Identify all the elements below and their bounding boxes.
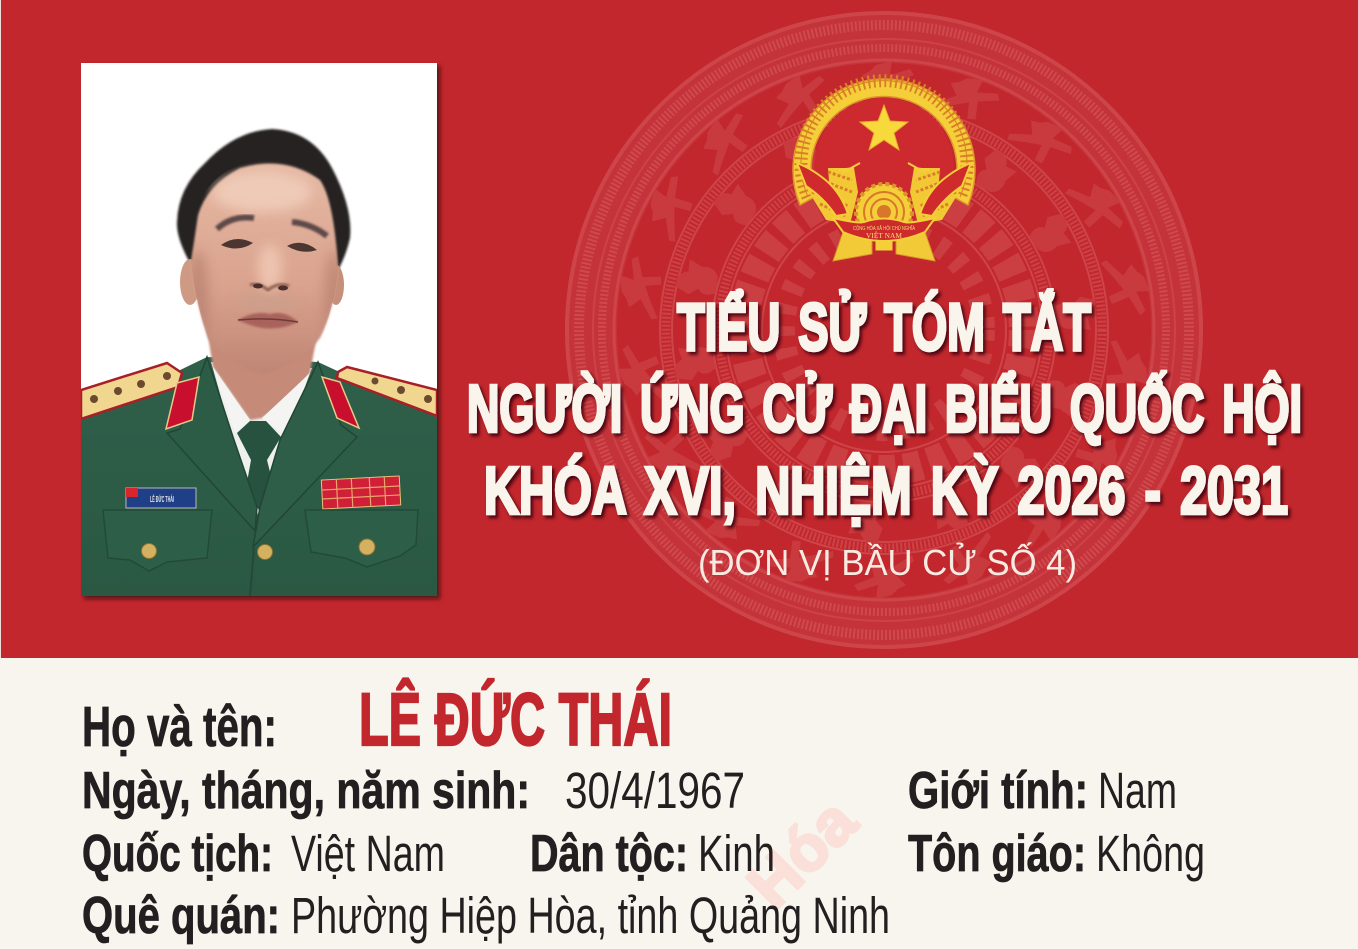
portrait photo [81, 63, 437, 596]
title line 1: TIỂU SỬ TÓM TẮT [677, 290, 1091, 365]
ribbon base [833, 232, 935, 261]
left lapel [167, 357, 257, 531]
ethnicity value: Kinh [698, 825, 775, 882]
birth date value: 30/4/1967 [565, 762, 745, 819]
mouth [238, 313, 298, 329]
birth date and gender row [82, 762, 1177, 820]
face shading [188, 172, 343, 350]
pockets [103, 510, 212, 571]
wheat wreath [793, 79, 975, 205]
subtitle: (ĐƠN VỊ BẦU CỬ SỐ 4) [698, 541, 1077, 583]
name row [82, 678, 672, 761]
name value: LÊ ĐỨC THÁI [359, 678, 672, 761]
collar edge [213, 367, 310, 421]
right wheat and ribbon [908, 163, 971, 224]
right lapel [253, 362, 357, 547]
portrait photo: LÊ ĐỨC THÁI [150, 495, 174, 504]
ethnicity label: Dân tộc: [530, 825, 688, 883]
hometown value: Phường Hiệp Hòa, tỉnh Quảng Ninh [291, 887, 890, 944]
nationality label: Quốc tịch: [82, 825, 273, 883]
jacket [81, 357, 437, 596]
information panel [0, 658, 1358, 949]
decorative bronze drum pattern [567, 13, 1201, 647]
ears [180, 259, 198, 305]
hometown row [82, 887, 890, 945]
lower ribbon [833, 218, 935, 241]
hometown label: Quê quán: [82, 887, 280, 945]
right epaulette [337, 367, 437, 416]
gender value: Nam [1098, 762, 1177, 819]
collar tabs [166, 377, 199, 429]
gender label: Giới tính: [908, 762, 1088, 820]
left edge line [0, 0, 1, 658]
neck [207, 330, 318, 420]
tie [237, 421, 281, 512]
red header panel [0, 0, 1358, 658]
ribbon text line 1: CỘNG HÒA XÃ HỘI CHỦ NGHĨA [853, 225, 916, 232]
main title [467, 290, 1302, 528]
left wheat and ribbon [797, 163, 860, 224]
nose [250, 284, 289, 290]
shirt collar [211, 362, 312, 515]
nationality, ethnicity and religion row [82, 825, 1205, 883]
left epaulette [81, 363, 182, 419]
religion label: Tôn giáo: [908, 825, 1086, 883]
buttons [142, 539, 375, 560]
nationality value: Việt Nam [291, 825, 445, 882]
birth date label: Ngày, tháng, năm sinh: [82, 762, 530, 820]
eyebrows [217, 217, 254, 229]
head [190, 162, 340, 346]
religion value: Không [1096, 825, 1205, 882]
name label: Họ và tên: [82, 695, 277, 759]
hair back [177, 129, 350, 272]
emblem red disc [814, 98, 954, 238]
epaulette stars [90, 372, 432, 403]
national emblem [793, 79, 975, 261]
gear [856, 184, 912, 240]
jacket front seam [250, 548, 254, 596]
eyes [221, 239, 253, 249]
star [860, 105, 908, 150]
wreath grain marks [801, 81, 967, 197]
ribbon text line 2: VIỆT NAM [866, 232, 903, 240]
name tag [126, 488, 196, 508]
watermark: Hóa [733, 785, 870, 921]
ribbon rack [321, 476, 401, 509]
